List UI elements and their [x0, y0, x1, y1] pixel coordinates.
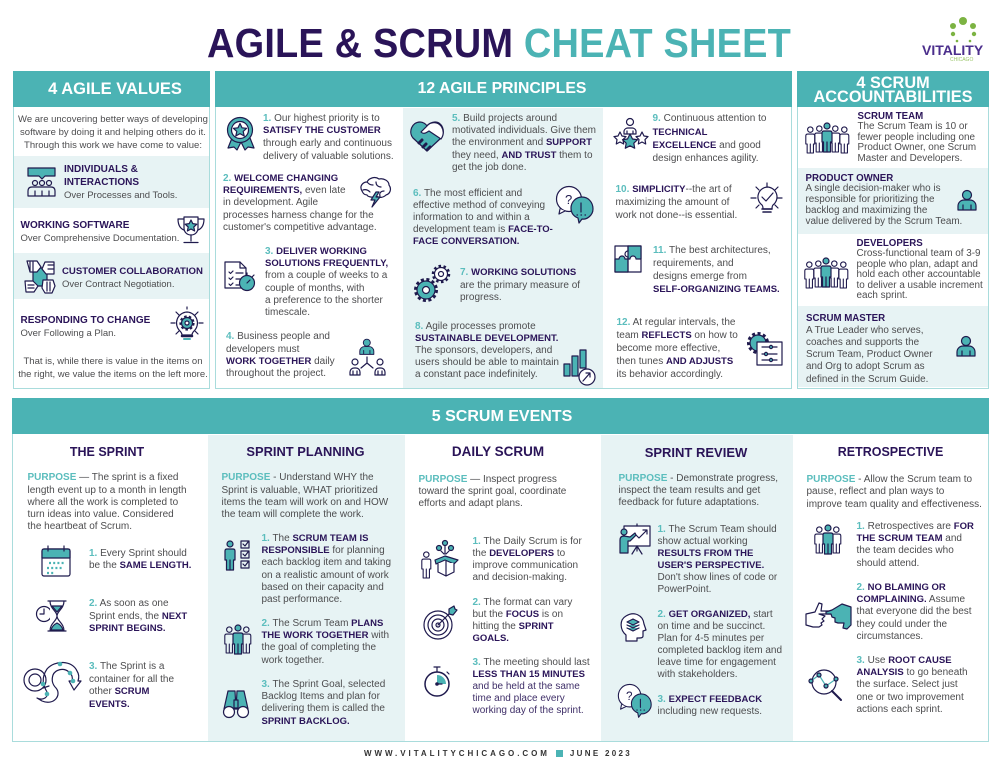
principle 6: development team is FACE-TO-	[413, 224, 553, 235]
row background: scrum master	[798, 306, 988, 387]
product owner: backlog and maximizing the	[806, 205, 927, 216]
principle 5: they need, AND TRUST them to	[452, 150, 593, 160]
principle 12: become more effective,	[616, 342, 720, 354]
intro text: Through this work we have come to value:	[24, 140, 202, 150]
principle 8: The sponsors, developers, and	[415, 345, 552, 356]
icon: question and answer bubbles	[556, 186, 593, 223]
icon: person and box	[422, 540, 458, 578]
principle 3: couple of months, with	[265, 282, 364, 294]
sprint planning: purpose: Sprint is valuable, WHAT prioritized	[222, 485, 378, 496]
developers: to deliver a usable increment	[856, 280, 983, 290]
sprint review: purpose: feedback for future adaptations.	[618, 497, 759, 508]
icon: retrospective team	[815, 525, 841, 554]
event: sprint review title: SPRINT REVIEW	[645, 445, 747, 460]
panel: 5 scrum events	[12, 398, 989, 742]
principle 5: motivated individuals. Give them	[452, 125, 596, 136]
panel: 4 agile values	[13, 71, 210, 389]
icon: question and answer bubbles: ?	[565, 192, 572, 207]
developers: DEVELOPERS	[856, 238, 923, 248]
principle 2: in development. Agile	[223, 197, 318, 208]
daily scrum: item 3: LESS THAN 15 MINUTES	[472, 669, 585, 680]
principle 10: maximizing the amount of	[616, 196, 729, 208]
sprint review: item 2: completed backlog item and	[658, 645, 782, 656]
sprint planning: item 2: 2. The Scrum Team PLANS	[262, 618, 383, 629]
row background: product owner	[798, 168, 988, 234]
daily scrum: item 1: and decision-making.	[472, 572, 567, 583]
daily scrum: purpose: efforts and adapt plans.	[418, 498, 523, 509]
principle 10	[616, 184, 737, 220]
daily scrum: item 2: but the FOCUS is on	[472, 608, 563, 620]
principle 2: processes harness change for the	[223, 210, 374, 220]
column background	[403, 108, 603, 388]
principle 1: SATISFY THE CUSTOMER	[263, 125, 381, 136]
icon: presentation	[620, 524, 650, 554]
intro text: We are uncovering better ways of developing	[18, 114, 208, 124]
principle 9: TECHNICAL	[652, 127, 707, 138]
developers: each sprint.	[856, 290, 908, 301]
daily scrum: item 2	[472, 596, 572, 644]
scrum master: defined in the Scrum Guide.	[806, 374, 928, 385]
heading: 12 agile principles: 12 AGILE PRINCIPLES	[418, 80, 586, 97]
sprint review: item 1: USER'S PERSPECTIVE.	[658, 560, 764, 571]
scrum team	[858, 110, 976, 164]
the sprint: purpose: the heartbeat of Scrum.	[28, 521, 132, 532]
principle 9: EXCELLENCE and good	[652, 140, 761, 151]
retrospective: item 2: COMPLAINING. Assume	[856, 594, 965, 605]
daily scrum: item 3: time and place every	[472, 693, 565, 704]
principle 6: effective method of conveying	[413, 200, 545, 211]
scrum master: SCRUM MASTER	[806, 312, 885, 324]
icon: growth chart	[564, 350, 595, 385]
scrum master: coaches and supports the	[806, 337, 919, 348]
retrospective: item 1: should attend.	[856, 558, 919, 568]
principle 9	[652, 113, 766, 164]
icon: meeting team	[28, 168, 55, 196]
closing text: That is, while there is value in the items on	[23, 356, 202, 366]
event: sprint planning title: SPRINT PLANNING	[246, 444, 365, 459]
sprint review: item 1: RESULTS FROM THE	[658, 548, 753, 559]
principle 5: the environment and SUPPORT	[452, 137, 592, 148]
the sprint: item 1	[89, 548, 191, 571]
icon: trophy	[178, 217, 204, 242]
column background: sprint review	[601, 435, 793, 741]
the sprint: item 3: other SCRUM	[89, 686, 149, 697]
the sprint: item 2: 2. As soon as one	[89, 598, 169, 609]
the sprint: item 3: 3. The Sprint is a	[89, 661, 164, 672]
value: working software: WORKING SOFTWARE	[20, 220, 129, 230]
product owner: value delivered by the Scrum Team.	[806, 216, 962, 227]
the sprint: purpose: where all the work is completed to	[28, 497, 178, 508]
icon: heart handshake	[411, 122, 443, 151]
value: working software	[20, 220, 179, 244]
principle 12	[616, 316, 738, 380]
icon: bulb with gear	[171, 307, 203, 339]
principle 1: delivery of valuable solutions.	[263, 151, 394, 162]
sprint planning: item 3: SPRINT BACKLOG.	[262, 716, 350, 726]
daily scrum: item 3	[472, 657, 590, 716]
daily scrum: purpose: toward the sprint goal, coordinate	[418, 486, 566, 497]
principle 12: then tunes AND ADJUSTS	[616, 356, 733, 366]
icon: person with stars	[614, 118, 648, 148]
daily scrum: purpose: PURPOSE — Inspect progress	[418, 474, 557, 485]
scrum master	[806, 312, 933, 385]
principle 9: 9. Continuous attention to	[652, 113, 766, 124]
event: the sprint title: THE SPRINT	[70, 444, 144, 458]
sprint review: item 2: Plan for 4-5 minutes per	[658, 633, 764, 644]
row background: individuals	[14, 156, 209, 208]
principle 7	[460, 267, 580, 303]
sprint review: purpose: inspect the team results and get	[618, 485, 760, 496]
retrospective: purpose: improve team quality and effectiveness.	[806, 499, 982, 510]
daily scrum: item 1: 1. The Daily Scrum is for	[472, 536, 582, 547]
icon: gear and sliders	[748, 334, 782, 365]
principle 8: SUSTAINABLE DEVELOPMENT.	[415, 333, 558, 344]
daily scrum: item 3: working day of the sprint.	[472, 705, 584, 716]
the sprint: purpose: turn ideas into value. Considered	[28, 509, 174, 520]
icon: four hands	[25, 261, 55, 293]
value: individuals	[64, 164, 177, 200]
value: individuals: INDIVIDUALS &	[64, 164, 138, 174]
sprint review: purpose	[618, 473, 778, 508]
principle 11: designs emerge from	[653, 271, 747, 282]
scrum master: Scrum Team, Product Owner	[806, 349, 933, 360]
daily scrum: item 3: and be held at the same	[472, 681, 580, 692]
icon: magnifier with data	[809, 670, 841, 700]
scrum team: The Scrum Team is 10 or	[858, 121, 968, 132]
intro text: software by doing it and helping others do it.	[20, 126, 206, 138]
icon: team hierarchy	[350, 339, 385, 375]
the sprint: item 1: be the SAME LENGTH.	[89, 560, 191, 571]
the sprint: item 2: SPRINT BEGINS.	[89, 623, 166, 634]
icon: puzzle	[615, 246, 641, 272]
icon: feedback bubbles	[618, 684, 651, 717]
icon: brain	[361, 178, 390, 207]
retrospective: item 2	[856, 582, 972, 643]
value: working software: Over Comprehensive Documentation.	[20, 233, 179, 244]
sprint review: purpose: PURPOSE - Demonstrate progress,	[618, 473, 778, 484]
principle 11: requirements, and	[653, 258, 734, 269]
developers: Cross-functional team of 3-9	[856, 248, 981, 259]
retrospective: purpose	[806, 474, 982, 511]
sprint review: item 3	[658, 694, 762, 717]
principle 3: from a couple of weeks to a	[265, 270, 387, 281]
retrospective: item 2: 2. NO BLAMING OR	[856, 582, 946, 593]
the sprint: item 2	[89, 598, 188, 634]
retrospective: item 1: THE SCRUM TEAM and	[856, 533, 962, 544]
retrospective: item 1: the team decides who	[856, 545, 954, 556]
daily scrum: purpose	[418, 474, 566, 509]
panel: 12 agile principles	[215, 71, 792, 389]
sprint review: item 3: 3. EXPECT FEEDBACK	[658, 694, 762, 705]
product owner: responsible for prioritizing the	[806, 194, 934, 205]
principle 1	[263, 113, 394, 162]
icon: planning team	[225, 625, 251, 654]
retrospective: item 1: 1. Retrospectives are FOR	[856, 521, 974, 532]
principle 4: 4. Business people and	[226, 331, 330, 342]
value: customer collaboration: Over Contract Negotiation.	[62, 279, 174, 290]
the sprint: item 3: EVENTS.	[89, 699, 130, 710]
principle 1: through early and continuous	[263, 138, 392, 149]
sprint review: item 1: show actual working	[658, 536, 748, 547]
principle 10: 10. SIMPLICITY--the art of	[616, 184, 732, 194]
sprint review: item 2: 2. GET ORGANIZED, start	[658, 609, 773, 620]
principle 8: 8. Agile processes promote	[415, 321, 536, 332]
icon: head with layers	[621, 614, 646, 641]
footer: WWW.VITALITYCHICAGO.COM JUNE 2023	[364, 749, 632, 758]
retrospective: purpose: pause, reflect and plan ways to	[806, 486, 944, 497]
sprint planning: item 1: past performance.	[262, 594, 342, 605]
heading: 4 scrum accountabilities: ACCOUNTABILITIES	[814, 88, 972, 106]
principle 8	[415, 321, 559, 380]
principle 4: developers must	[226, 344, 299, 355]
value: responding to change: Over Following a Plan.	[20, 328, 116, 339]
value: customer collaboration	[62, 266, 203, 290]
scrum team: fewer people including one	[858, 132, 975, 142]
logo: Vitality Chicago: VITALITY	[922, 42, 983, 58]
sprint planning: item 3	[262, 679, 385, 726]
developers: people who plan, adapt and	[856, 258, 978, 270]
the sprint: item 3	[89, 661, 174, 710]
sprint planning: item 3: delivering them is called the	[262, 703, 385, 714]
principle 3: SOLUTIONS FREQUENTLY,	[265, 258, 388, 269]
scrum master: and Org to adopt Scrum as	[806, 361, 925, 372]
icon: feedback bubbles: ?	[626, 690, 633, 703]
sprint review: item 1: Don't show lines of code or	[658, 572, 777, 583]
principle 8: users should be able to maintain	[415, 357, 559, 368]
principle 3: timescale.	[265, 307, 310, 318]
principle 6: information to and within a	[413, 212, 530, 223]
logo: Vitality Chicago	[922, 17, 983, 63]
value: individuals: INTERACTIONS	[64, 176, 139, 188]
heading: 5 scrum events	[12, 398, 989, 434]
heading: 5 scrum events: 5 SCRUM EVENTS	[432, 408, 572, 425]
principle 6	[413, 188, 553, 247]
sprint planning: item 2: THE WORK TOGETHER with	[262, 630, 389, 641]
icon: stopwatch	[425, 667, 449, 696]
icon: award badge	[228, 118, 254, 150]
sprint planning: purpose	[222, 472, 388, 520]
daily scrum: item 1: the DEVELOPERS to	[472, 548, 565, 559]
principle 11: 11. The best architectures,	[653, 245, 771, 256]
product owner	[806, 172, 962, 227]
daily scrum: item 1: improve communication	[472, 560, 578, 571]
principle 6: 6. The most efficient and	[413, 188, 522, 199]
scrum team: Master and Developers.	[858, 152, 962, 164]
principle 5: 5. Build projects around	[452, 113, 557, 124]
closing text	[18, 356, 208, 380]
principle 12: its behavior accordingly.	[616, 368, 723, 380]
sprint planning: item 1: on a realistic amount of work	[262, 570, 389, 580]
sprint review: item 2: with stakeholders.	[658, 669, 738, 680]
retrospective: item 3: the surface. Select just	[856, 679, 958, 690]
retrospective: item 1	[856, 521, 974, 570]
sprint planning: item 1: RESPONSIBLE for planning	[262, 545, 385, 556]
sprint planning: item 3: 3. The Sprint Goal, selected	[262, 679, 385, 690]
sprint review: item 1: 1. The Scrum Team should	[658, 524, 777, 535]
icon: pointing hands	[806, 603, 851, 629]
sprint review: item 1: PowerPoint.	[658, 584, 711, 595]
heading: 4 scrum accountabilities	[797, 71, 989, 107]
sprint planning: item 2	[262, 618, 389, 666]
developers	[856, 238, 983, 301]
icon: gears	[416, 266, 449, 300]
principle 5	[452, 113, 596, 173]
developers: hold each other accountable	[856, 269, 981, 280]
principle 4: throughout the project.	[226, 368, 326, 379]
icon: scrum team	[806, 123, 849, 153]
the sprint: purpose: PURPOSE — The sprint is a fixed	[28, 472, 178, 483]
sprint planning: purpose: PURPOSE - Understand WHY the	[222, 472, 374, 483]
sprint planning: item 2: the goal of completing the	[262, 642, 376, 653]
title: AGILE & SCRUM CHEAT SHEET	[207, 20, 791, 66]
principle 8: a constant pace indefinitely.	[415, 369, 538, 380]
scrum team: Product Owner, one Scrum	[858, 142, 976, 153]
principle 3: 3. DELIVER WORKING	[265, 246, 367, 257]
sprint planning: item 1: each backlog item and taking	[262, 557, 391, 568]
principle 2	[223, 173, 377, 233]
row background: customer collaboration	[14, 253, 209, 299]
icon: checklist and stopwatch	[225, 262, 254, 290]
retrospective: purpose: PURPOSE - Allow the Scrum team to	[806, 474, 972, 485]
principle 7: 7. WORKING SOLUTIONS	[460, 267, 576, 278]
value: responding to change	[20, 314, 150, 339]
icon: target	[424, 606, 457, 639]
the sprint: purpose: length event up to a month in length	[28, 485, 187, 496]
principle 12: 12. At regular intervals, the	[616, 316, 735, 328]
principle 2: customer's competitive advantage.	[223, 222, 377, 233]
principle 6: FACE CONVERSATION.	[413, 236, 519, 247]
scrum team: SCRUM TEAM	[858, 110, 923, 122]
sprint review: item 3: including new requests.	[658, 706, 762, 717]
product owner: PRODUCT OWNER	[806, 172, 893, 184]
event: retrospective title: RETROSPECTIVE	[838, 445, 943, 459]
heading: 4 scrum accountabilities: 4 SCRUM	[856, 74, 930, 92]
principle 10: work not done--is essential.	[616, 210, 737, 220]
sprint planning: item 3: Backlog Items and plan for	[262, 691, 380, 702]
sprint planning: purpose: the team will complete the work.	[222, 509, 364, 520]
retrospective: item 3: 3. Use ROOT CAUSE	[856, 655, 952, 666]
heading: 4 agile values	[13, 71, 210, 107]
value: individuals: Over Processes and Tools.	[64, 190, 177, 200]
product owner: A single decision-maker who is	[806, 183, 941, 194]
sprint review: item 2: on time and be succinct.	[658, 621, 765, 632]
principle 12: team REFLECTS on how to	[616, 330, 738, 340]
the sprint: item 2: Sprint ends, the NEXT	[89, 611, 187, 622]
closing text: the right, we value the items on the left more.	[18, 368, 208, 380]
principle 1: 1. Our highest priority is to	[263, 113, 380, 124]
principle 4	[226, 331, 335, 379]
principle 2: 2. WELCOME CHANGING	[223, 173, 338, 184]
principle 11: SELF-ORGANIZING TEAMS.	[653, 284, 780, 295]
heading: 12 agile principles	[215, 71, 792, 107]
sprint planning: item 1: 1. The SCRUM TEAM IS	[262, 533, 368, 544]
column background: sprint planning	[208, 435, 405, 741]
daily scrum: item 2: GOALS.	[472, 632, 509, 644]
icon: scrum master	[957, 336, 975, 356]
retrospective: item 3: one or two improvement	[856, 692, 964, 702]
logo: Vitality Chicago: CHICAGO	[950, 57, 973, 63]
value: responding to change: RESPONDING TO CHANGE	[20, 314, 150, 326]
icon: lightbulb with check	[751, 183, 782, 212]
icon: binoculars	[224, 691, 248, 718]
panel: 4 scrum accountabilities	[797, 71, 989, 389]
the sprint: item 3: container for all the	[89, 674, 174, 685]
principle 3: a preference to the shorter	[265, 295, 383, 306]
scrum master: A True Leader who serves,	[806, 325, 923, 336]
principle 7: progress.	[460, 292, 502, 303]
sprint review: item 2: leave time for engagement	[658, 657, 776, 668]
principle 7: are the primary measure of	[460, 280, 580, 291]
principle 2: REQUIREMENTS, even late	[223, 185, 346, 196]
retrospective: item 3: actions each sprint.	[856, 704, 943, 715]
heading: 4 agile values: 4 AGILE VALUES	[48, 80, 182, 98]
sprint planning: item 1: based on their capacity and	[262, 582, 384, 593]
principle 4: WORK TOGETHER daily	[226, 356, 335, 367]
daily scrum: item 3: 3. The meeting should last	[472, 657, 590, 668]
principle 9: design enhances agility.	[652, 153, 758, 164]
retrospective: item 2: they could under the	[856, 618, 947, 630]
icon: developers	[805, 258, 848, 288]
event: daily scrum title: DAILY SCRUM	[452, 444, 544, 458]
icon: calendar	[42, 546, 70, 576]
intro text	[18, 114, 208, 150]
principle 3	[265, 246, 388, 318]
retrospective: item 2: that everyone did the best	[856, 606, 972, 617]
icon: person with checklist	[225, 541, 249, 570]
daily scrum: item 2: hitting the SPRINT	[472, 620, 554, 632]
icon: hourglass and clock	[36, 601, 66, 631]
sprint planning: item 1	[262, 533, 391, 605]
daily scrum: item 2: 2. The format can vary	[472, 596, 572, 608]
retrospective: item 3	[856, 655, 968, 716]
retrospective: item 3: ANALYSIS to go beneath	[856, 667, 968, 678]
icon: sprint cycle arrows	[24, 662, 81, 702]
sprint planning: purpose: items the team will work on and HOW	[222, 497, 388, 508]
icon: product owner	[958, 190, 976, 210]
sprint review: item 2	[658, 609, 782, 680]
the sprint: purpose	[28, 472, 187, 532]
retrospective: item 2: circumstances.	[856, 631, 923, 642]
sprint planning: item 2: work together.	[262, 654, 324, 666]
the sprint: item 1: 1. Every Sprint should	[89, 548, 187, 559]
value: customer collaboration: CUSTOMER COLLABORATION	[62, 266, 203, 276]
principle 5: get the job done.	[452, 162, 527, 173]
sprint review: item 1	[658, 524, 778, 595]
daily scrum: item 1	[472, 536, 582, 583]
principle 11	[653, 245, 780, 295]
